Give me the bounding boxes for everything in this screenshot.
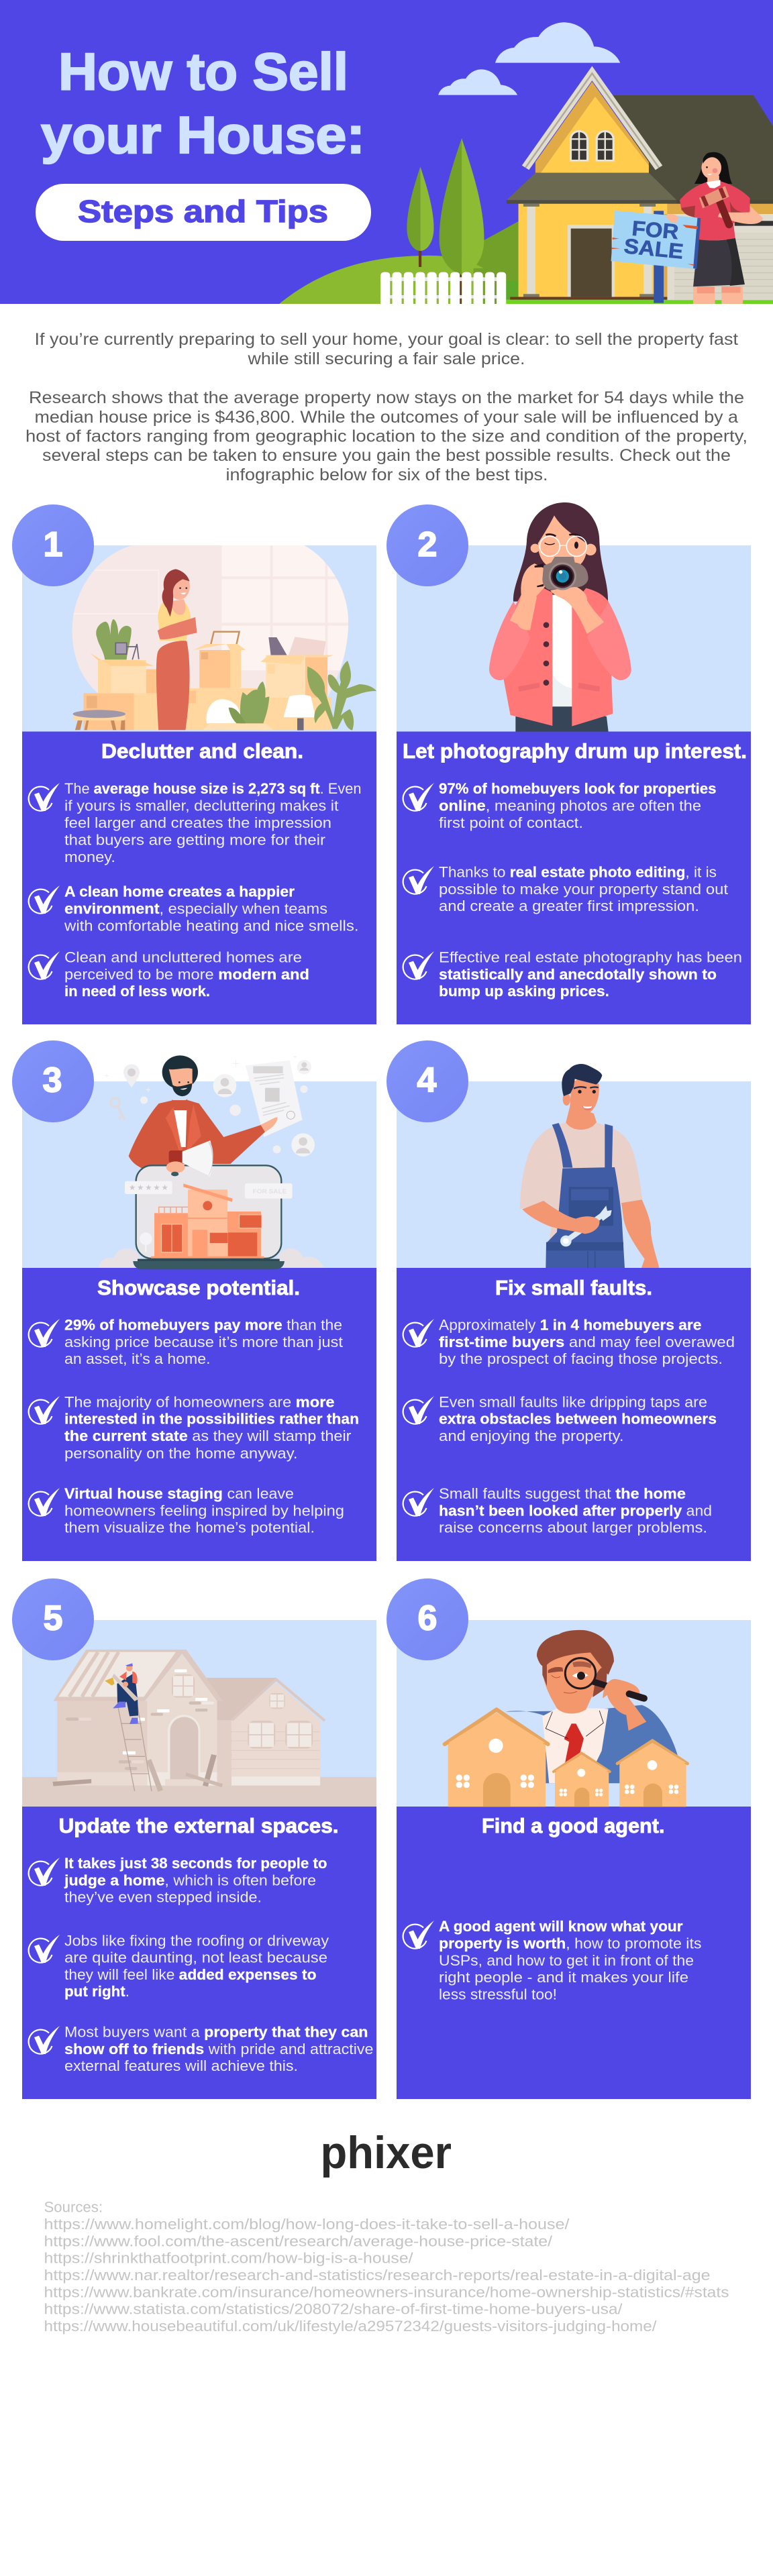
illustration: woman with camera xyxy=(489,502,631,732)
title xyxy=(41,42,365,164)
heading: Showcase potential. xyxy=(97,1276,300,1299)
tip 3: Effective real estate photography has been xyxy=(439,949,742,966)
tip 2: environment , especially when teams xyxy=(64,900,327,917)
for sale sign: FOR xyxy=(631,217,680,244)
tip 2: Jobs like fixing the roofing or driveway xyxy=(64,1932,329,1949)
tip 2: The majority of homeowners are more xyxy=(64,1394,334,1410)
intro text: Research shows that the average property now stays on the market for 54 days while the xyxy=(29,388,744,407)
icon: clouds xyxy=(438,22,620,95)
tip 3: perceived to be more modern and xyxy=(64,966,309,983)
number badge: 3 xyxy=(43,1061,62,1100)
tip 2: they will feel like added expenses to xyxy=(64,1966,316,1983)
worker xyxy=(105,1663,139,1724)
illustration: agent with magnifier and houses xyxy=(445,1630,688,1807)
ladder and boards xyxy=(52,1706,223,1792)
tip 3: in need of less work. xyxy=(64,983,210,1000)
tip 2: Thanks to real estate photo editing , it is xyxy=(439,864,717,880)
rating and for-sale tags: FOR SALE xyxy=(253,1188,287,1195)
hero banner xyxy=(0,0,773,310)
illustration: woman among boxes xyxy=(70,543,376,731)
tip 3: statistically and anecdotally shown to xyxy=(439,966,717,983)
tip 3 xyxy=(403,1485,712,1536)
number badge: 2 xyxy=(418,525,437,564)
intro text: host of factors ranging from geographic location to the size and condition of the property, xyxy=(25,427,748,445)
tip 2 xyxy=(29,1932,329,2000)
house on screen xyxy=(140,1183,264,1258)
tip 1 xyxy=(29,780,361,865)
number badge xyxy=(12,1040,94,1122)
title: your House: xyxy=(41,105,365,164)
boxes xyxy=(84,619,333,730)
tip 1 xyxy=(29,1855,327,1905)
panel: step 6 agent xyxy=(386,1578,751,2099)
tip 1: asking price because it’s more than just xyxy=(64,1334,343,1350)
bricks xyxy=(66,1669,214,1770)
tip 2: put right. xyxy=(64,1983,130,2000)
clouds xyxy=(99,1248,324,1267)
sources xyxy=(44,2199,729,2334)
woman xyxy=(156,569,197,730)
subtitle pill: Steps and Tips xyxy=(78,194,328,229)
tip 1: first-time buyers and may feel overawed xyxy=(439,1334,735,1350)
tip 3: hasn’t been looked after properly and xyxy=(439,1503,712,1519)
tip 1: Approximately 1 in 4 homebuyers are xyxy=(439,1316,702,1334)
house xyxy=(507,73,773,300)
paper xyxy=(246,1061,303,1137)
tip 2: Even small faults like dripping taps are xyxy=(439,1394,707,1410)
subtitle pill xyxy=(36,184,371,241)
tip 3: Virtual house staging can leave xyxy=(64,1485,294,1502)
tip 1: an asset, it’s a home. xyxy=(64,1350,211,1367)
panel: step 5 external spaces xyxy=(12,1578,376,2099)
tip 2 xyxy=(403,1394,717,1444)
intro text: several steps can be taken to ensure you gain the best possible results. Check out the xyxy=(42,446,731,465)
tip 2 xyxy=(29,883,358,934)
tip 3: Clean and uncluttered homes are xyxy=(64,949,302,966)
sources: https://www.fool.com/the-ascent/research/average-house-price-state/ xyxy=(44,2233,553,2250)
sources: https://www.homelight.com/blog/how-long-does-it-take-to-sell-a-house/ xyxy=(44,2216,570,2233)
number badge: 5 xyxy=(44,1599,62,1638)
number badge: 6 xyxy=(418,1599,437,1638)
tip 3 xyxy=(403,949,742,1000)
laptop xyxy=(133,1165,285,1269)
trees xyxy=(407,138,484,304)
panel: step 3 showcase xyxy=(12,1040,376,1561)
number badge xyxy=(12,504,94,586)
tip 1: money. xyxy=(64,849,115,865)
tip 1 xyxy=(29,1316,343,1367)
tip 1: if yours is smaller, decluttering makes it xyxy=(64,797,338,814)
tip 1: A good agent will know what your xyxy=(439,1918,683,1935)
tip 3 xyxy=(29,2023,373,2074)
tip 1: 29% of homebuyers pay more than the xyxy=(64,1316,342,1334)
sources: https://www.statista.com/statistics/208072/share-of-first-time-home-buyers-usa/ xyxy=(44,2301,623,2317)
windows and door xyxy=(165,1674,313,1786)
tip 2: personality on the home anyway. xyxy=(64,1445,298,1462)
intro text: infographic below for six of the best tips. xyxy=(225,466,548,484)
tip 1: less stressful too! xyxy=(439,1986,557,2003)
tip 3: homeowners feeling inspired by helping xyxy=(64,1503,344,1519)
panel: step 4 small faults xyxy=(386,1040,751,1561)
number badge xyxy=(386,1040,468,1122)
sources: Sources: xyxy=(44,2199,103,2215)
illustration: handyman xyxy=(520,1064,659,1268)
illustration: house for sale xyxy=(279,22,773,310)
floating icons xyxy=(105,1055,315,1157)
rating and for-sale tags: ★★★★★ xyxy=(129,1184,168,1192)
tip 1: property is worth , how to promote its xyxy=(439,1935,702,1952)
tip 1: 97% of homebuyers look for properties xyxy=(439,780,717,797)
woman xyxy=(680,152,763,304)
for sale sign xyxy=(611,211,701,303)
plants and stool xyxy=(72,661,376,731)
tip 1: The average house size is 2,273 sq ft. Even xyxy=(64,780,361,797)
sources: https://www.bankrate.com/insurance/homeowners-insurance/home-ownership-statistics/#stats xyxy=(44,2284,729,2301)
sources: https://www.housebeautiful.com/uk/lifestyle/a29572342/guests-visitors-judging-home/ xyxy=(44,2318,657,2334)
number badge xyxy=(386,1578,468,1660)
intro text: If you’re currently preparing to sell your home, your goal is clear: to sell the property fast xyxy=(35,330,738,349)
tip 1: first point of contact. xyxy=(439,814,583,831)
man xyxy=(129,1055,277,1173)
tip 1 xyxy=(403,780,717,831)
tip 2: and create a greater first impression. xyxy=(439,898,699,914)
tip 2 xyxy=(403,864,728,914)
illustration: agent with laptop xyxy=(99,1055,324,1269)
number badge xyxy=(386,504,468,586)
tip 3: Small faults suggest that the home xyxy=(439,1485,686,1502)
sources: https://shrinkthatfootprint.com/how-big-is-a-house/ xyxy=(44,2250,413,2266)
heading: Let photography drum up interest. xyxy=(403,739,747,763)
tip 2: interested in the possibilities rather than xyxy=(64,1410,359,1428)
tip 2: with comfortable heating and nice smells. xyxy=(64,918,358,934)
illustration: house under repair xyxy=(22,1650,376,1807)
hills xyxy=(279,221,773,304)
number badge: 4 xyxy=(417,1061,437,1100)
fence xyxy=(380,272,506,304)
panel: step 2 photography xyxy=(386,502,751,1024)
tip 3: show off to friends with pride and attractive xyxy=(64,2041,373,2057)
tip 1: online, meaning photos are often the xyxy=(439,797,701,814)
heading: Update the external spaces. xyxy=(59,1814,338,1837)
intro text xyxy=(25,330,748,484)
number badge xyxy=(12,1578,94,1660)
house walls and roofs xyxy=(53,1650,325,1786)
heading: Find a good agent. xyxy=(482,1814,664,1837)
logo: phixer xyxy=(321,2127,452,2178)
tip 1: by the prospect of facing those projects. xyxy=(439,1350,723,1367)
number badge: 1 xyxy=(44,525,62,564)
tip 1: feel larger and creates the impression xyxy=(64,814,331,831)
intro text: while still securing a fair sale price. xyxy=(247,350,525,368)
tip 1: that buyers are getting more for their xyxy=(64,832,325,848)
houses xyxy=(445,1709,688,1807)
tip 3 xyxy=(29,1485,344,1536)
panel: step 1 declutter xyxy=(12,504,376,1024)
intro text: median house price is $436,800. While the outcomes of your sale will be influenced by a xyxy=(35,408,738,427)
tip 1: It takes just 38 seconds for people to xyxy=(64,1855,327,1872)
windows xyxy=(570,130,615,162)
tip 2: extra obstacles between homeowners xyxy=(439,1410,717,1428)
tip 2: and enjoying the property. xyxy=(439,1428,624,1444)
tip 3: them visualize the home’s potential. xyxy=(64,1519,315,1536)
tip 1 xyxy=(403,1316,735,1367)
tip 1 xyxy=(403,1918,702,2003)
magnifying glass xyxy=(565,1658,646,1731)
title: How to Sell xyxy=(58,42,348,101)
megaphone xyxy=(166,1140,213,1176)
tip 3: Most buyers want a property that they can xyxy=(64,2023,368,2041)
tip 3: bump up asking prices. xyxy=(439,983,609,1000)
tip 2 xyxy=(29,1394,359,1462)
sources: https://www.nar.realtor/research-and-statistics/research-reports/real-estate-in-a-digital-age xyxy=(44,2267,710,2284)
tip 1: judge a home , which is often before xyxy=(64,1872,316,1889)
tip 2: are quite daunting, not least because xyxy=(64,1949,327,1966)
tip 1: right people - and it makes your life xyxy=(439,1969,688,1986)
heading: Declutter and clean. xyxy=(101,739,303,763)
tip 3: external features will achieve this. xyxy=(64,2057,298,2074)
tip 3: raise concerns about larger problems. xyxy=(439,1519,707,1536)
tip 1: USPs, and how to get it in front of the xyxy=(439,1952,694,1969)
tip 2: the current state as they will stamp their xyxy=(64,1428,352,1444)
tip 2: A clean home creates a happier xyxy=(64,883,295,900)
tip 2: possible to make your property stand out xyxy=(439,881,728,898)
rating and for-sale tags xyxy=(125,1181,293,1199)
heading: Fix small faults. xyxy=(495,1276,652,1299)
tip 1: they’ve even stepped inside. xyxy=(64,1889,262,1905)
tip 3 xyxy=(29,949,309,1000)
for sale sign: SALE xyxy=(623,234,684,264)
agent xyxy=(505,1630,678,1783)
